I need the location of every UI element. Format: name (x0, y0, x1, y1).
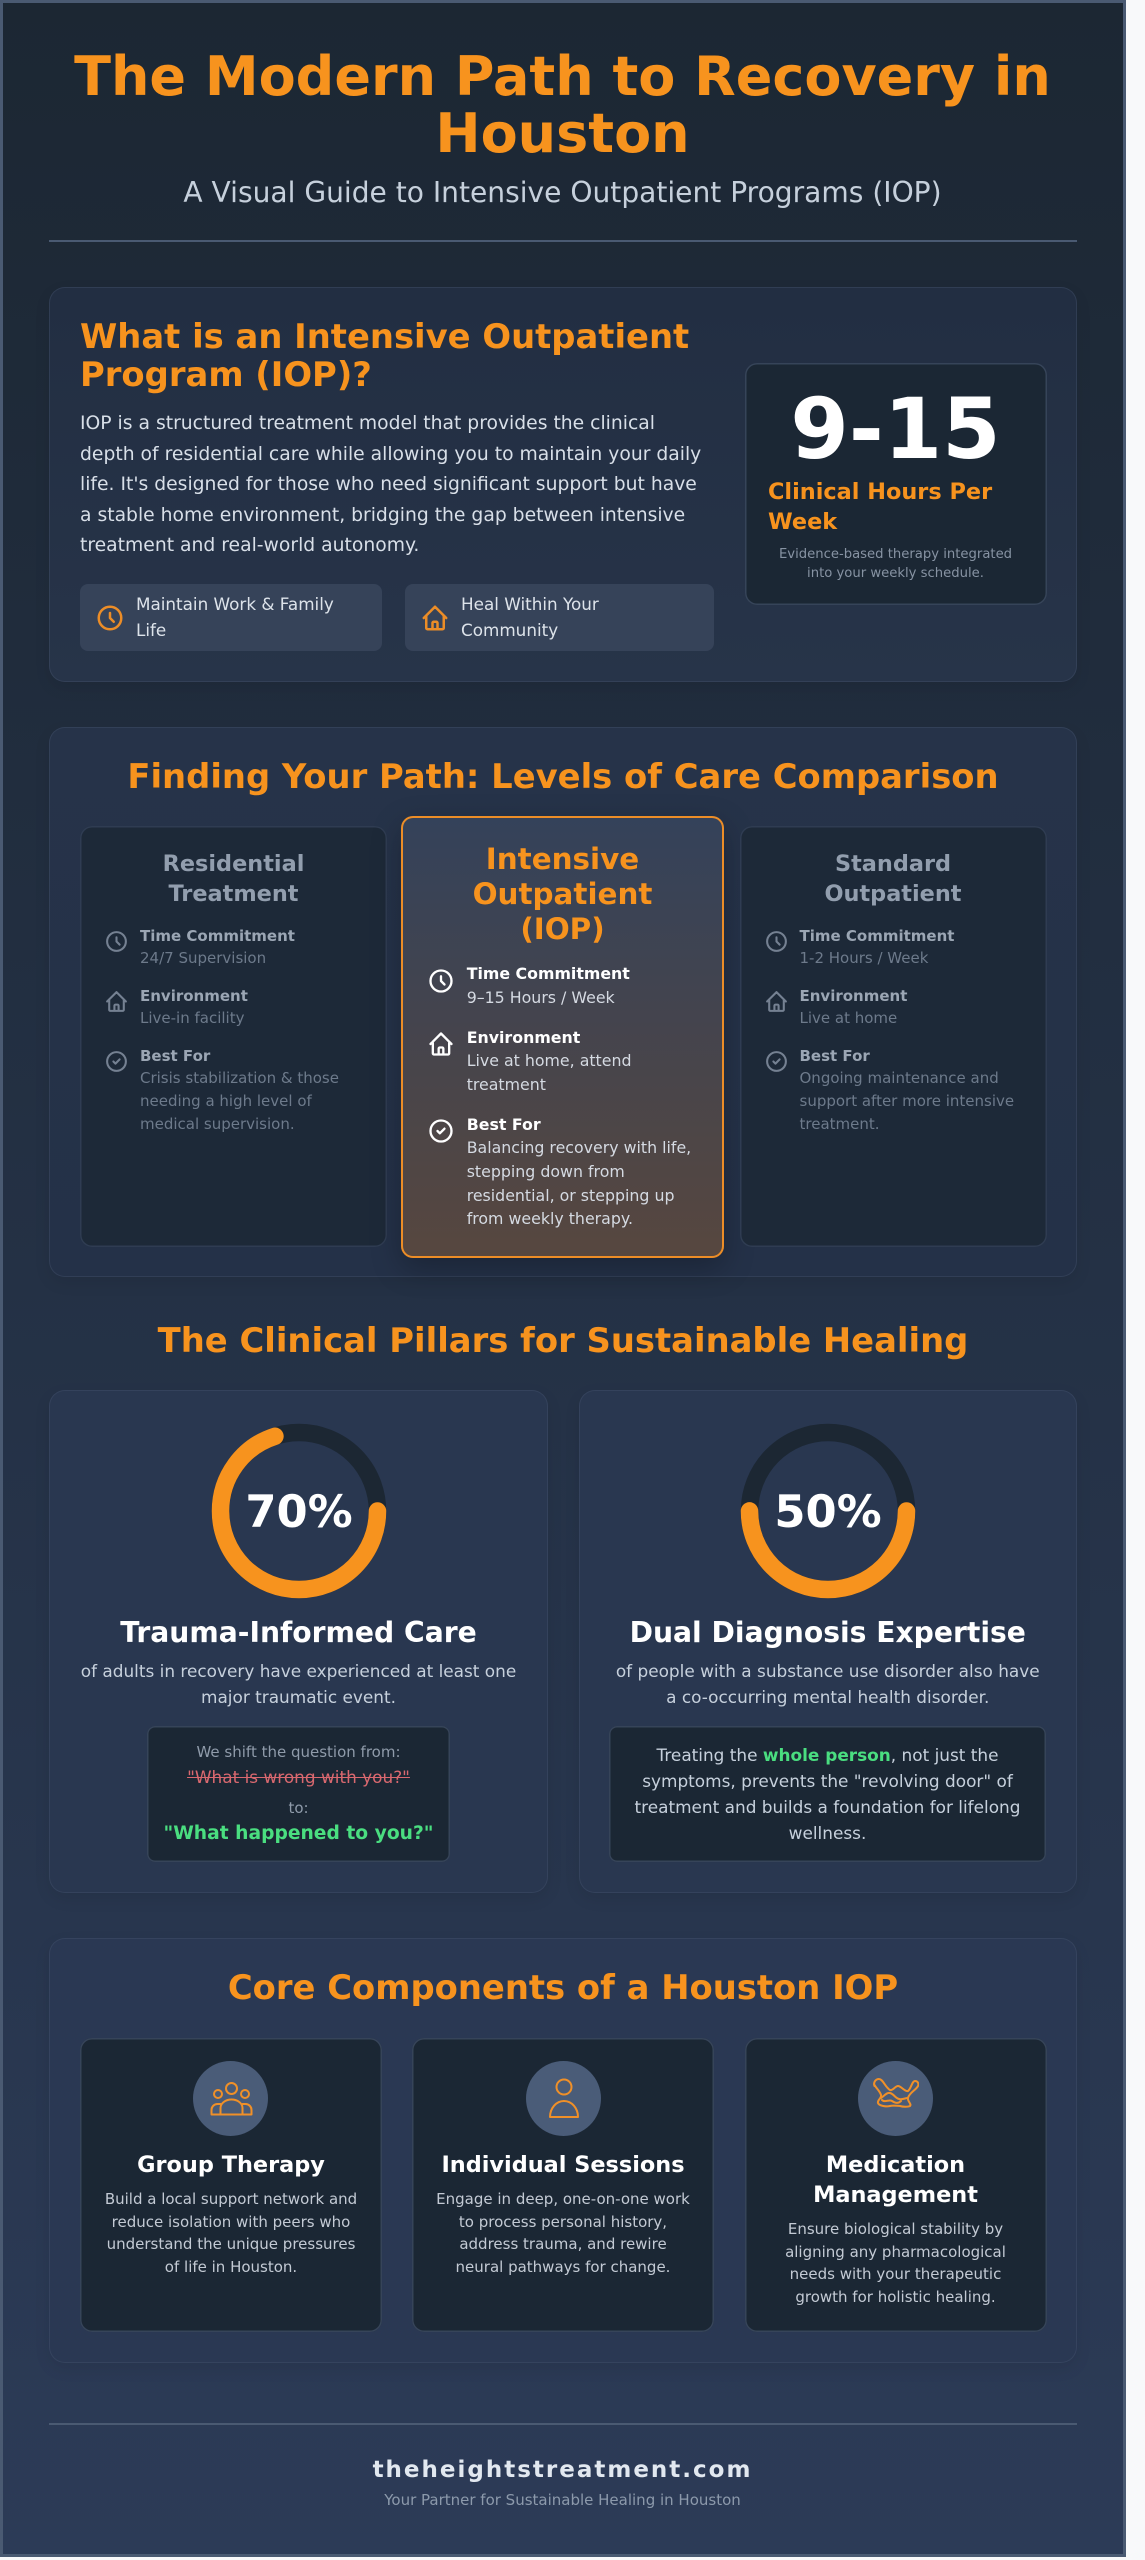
card: intensive outpatient highlighted (401, 816, 724, 1258)
callout text (634, 1744, 1020, 1843)
card: medication management (744, 2038, 1046, 2332)
environment: Live at home, attend (467, 1051, 632, 1070)
benefit label: Heal Within Your (461, 594, 599, 614)
benefit label: Maintain Work & Family (136, 594, 334, 614)
card title: Management (813, 2182, 978, 2208)
text block: IOP description: depth of residential care while allowing you to maintain your daily (80, 444, 701, 465)
environment: Environment (800, 987, 907, 1005)
card title (824, 851, 962, 907)
callout connector: to: (288, 1799, 309, 1817)
icon: check (766, 1051, 787, 1072)
callout text: symptoms, prevents the "revolving door" of (642, 1771, 1013, 1791)
card description: Ensure biological stability by (788, 2220, 1003, 2238)
best for: needing a high level of (140, 1092, 312, 1110)
icon: clock (429, 969, 453, 993)
card: residential treatment (80, 826, 387, 1246)
best for: Best For (800, 1047, 870, 1065)
best for: residential, or stepping up (467, 1186, 674, 1205)
time commitment: 1-2 Hours / Week (800, 949, 928, 967)
footer website: theheightstreatment.com (373, 2457, 752, 2483)
panel: core components (49, 1938, 1077, 2362)
pillar description (81, 1661, 516, 1707)
environment: treatment (467, 1075, 546, 1094)
time commitment: Time Commitment (800, 927, 954, 945)
time commitment (140, 927, 295, 967)
best for: medical supervision. (140, 1115, 295, 1133)
card title (163, 851, 304, 907)
best for: from weekly therapy. (467, 1209, 633, 1228)
card title: Treatment (168, 881, 298, 907)
icon: home (766, 991, 787, 1012)
benefit: community (405, 584, 714, 651)
icon: check (106, 1051, 127, 1072)
card description (785, 2220, 1006, 2306)
callout: whole person (609, 1726, 1046, 1862)
card description: Build a local support network and (105, 2190, 357, 2208)
text block: IOP description: treatment and real-world autonomy. (80, 535, 419, 556)
icon: group (193, 2060, 268, 2136)
best for (140, 1047, 339, 1133)
card description: growth for holistic healing. (795, 2288, 996, 2306)
card description: neural pathways for change. (456, 2258, 670, 2276)
card title: Outpatient (473, 877, 652, 911)
best for (467, 1115, 691, 1228)
card description: of life in Houston. (165, 2258, 297, 2276)
best for: Ongoing maintenance and (800, 1069, 999, 1087)
stat note (779, 547, 1012, 581)
card title (813, 2152, 978, 2208)
environment (467, 1028, 632, 1094)
time commitment (800, 927, 954, 967)
card title: Group Therapy (137, 2152, 325, 2178)
environment: Live at home (800, 1009, 897, 1027)
text block: IOP description: a stable home environment, bridging the gap between intensive (80, 505, 685, 526)
time commitment: Time Commitment (467, 964, 630, 983)
pillar description: of people with a substance use disorder also have (616, 1661, 1040, 1681)
card description (436, 2190, 690, 2276)
best for: Balancing recovery with life, (467, 1138, 691, 1157)
card title: Outpatient (824, 881, 962, 907)
best for: Best For (140, 1047, 210, 1065)
pillar description: major traumatic event. (201, 1687, 396, 1707)
environment: Environment (140, 987, 248, 1005)
card description: aligning any pharmacological (785, 2242, 1006, 2260)
card description (105, 2190, 357, 2276)
stat label: Week (768, 509, 837, 535)
card title: Intensive (486, 842, 639, 876)
stat card: 9-15 hours (744, 363, 1046, 605)
icon: clock (98, 606, 122, 630)
environment: Environment (467, 1028, 580, 1046)
time commitment (466, 964, 630, 1007)
best for: stepping down from (467, 1162, 625, 1181)
card description: understand the unique pressures (107, 2235, 355, 2253)
icon: clock (766, 931, 787, 952)
card title: Medication (826, 2152, 965, 2178)
time commitment: 24/7 Supervision (140, 949, 266, 967)
donut chart: 70% (212, 1424, 386, 1598)
benefit label: Community (461, 620, 558, 640)
benefit: work and family (80, 584, 382, 651)
heading: comparison: Finding Your Path: Levels of Care Comparison (127, 757, 999, 796)
footer tagline: Your Partner for Sustainable Healing in Houston (384, 2491, 741, 2509)
subtitle: A Visual Guide to Intensive Outpatient Programs (IOP) (183, 176, 942, 209)
callout intro: We shift the question from: (196, 1743, 401, 1761)
panel: dual diagnosis (578, 1390, 1077, 1893)
pillar description (616, 1661, 1040, 1707)
environment (800, 987, 908, 1027)
pillar description: of adults in recovery have experienced at least one (81, 1661, 516, 1681)
stat label (768, 479, 992, 535)
icon: check (429, 1119, 453, 1143)
heading: what is an IOP (80, 316, 689, 394)
card description: reduce isolation with peers who (112, 2212, 350, 2230)
heading: clinical pillars: The Clinical Pillars for Sustainable Healing (158, 1321, 968, 1360)
icon: home (429, 1032, 453, 1056)
callout: question shift (147, 1726, 450, 1862)
icon: person (526, 2060, 600, 2136)
icon: home (422, 605, 448, 630)
benefit label (461, 594, 599, 640)
struck question: "What is wrong with you?" (187, 1767, 410, 1787)
donut chart: 70%: 70% (245, 1484, 352, 1538)
heading: what is an IOP: What is an Intensive Outpatient (80, 316, 689, 356)
pillar title: Trauma-Informed Care (120, 1616, 477, 1649)
best for: Crisis stabilization & those (140, 1069, 339, 1087)
title (74, 44, 1051, 164)
card: standard outpatient (740, 826, 1046, 1246)
callout text: Treating the whole person, not just the (657, 1744, 998, 1764)
donut chart: 50% (740, 1424, 916, 1598)
pillar description: a co-occurring mental health disorder. (666, 1687, 989, 1707)
card title: Individual Sessions (441, 2152, 685, 2178)
best for: support after more intensive (800, 1092, 1014, 1110)
text block: IOP description: IOP is a structured treatment model that provides the clinical (80, 413, 655, 434)
stat note: Evidence-based therapy integrated (779, 547, 1012, 562)
card title (473, 842, 652, 946)
card title: Standard (835, 851, 951, 877)
callout text: treatment and builds a foundation for lifelong (635, 1797, 1020, 1817)
title: Houston (435, 102, 690, 164)
benefit label: Life (136, 620, 166, 640)
card: group therapy (80, 2038, 382, 2332)
card description: needs with your therapeutic (790, 2265, 1001, 2283)
card description: Engage in deep, one-on-one work (436, 2190, 690, 2208)
environment (140, 987, 248, 1027)
benefit label (136, 594, 334, 640)
pillar title: Dual Diagnosis Expertise (630, 1616, 1026, 1649)
heading: core components: Core Components of a Houston IOP (228, 1968, 898, 2006)
stat note: into your weekly schedule. (807, 566, 984, 581)
donut chart: 50%: 50% (774, 1484, 882, 1538)
environment: Live-in facility (140, 1009, 244, 1027)
time commitment: Time Commitment (140, 927, 295, 945)
panel: what is an IOP (49, 287, 1077, 682)
card: individual sessions (412, 2038, 714, 2332)
card title: (IOP) (520, 912, 605, 946)
icon: handshake (858, 2060, 933, 2136)
heading: what is an IOP: Program (IOP)? (80, 355, 372, 394)
stat label: Clinical Hours Per (768, 479, 992, 505)
stat number: 9-15 (790, 380, 1001, 478)
best for: treatment. (800, 1115, 880, 1133)
text block: IOP description: life. It's designed for those who need significant support but have (80, 474, 697, 495)
title: The Modern Path to Recovery in (74, 44, 1051, 108)
time commitment: 9–15 Hours / Week (467, 988, 615, 1007)
card description: address trauma, and rewire (459, 2235, 667, 2253)
card description: to process personal history, (459, 2212, 667, 2230)
icon: home (106, 991, 127, 1012)
callout text: wellness. (789, 1823, 866, 1843)
new question: "What happened to you?" (163, 1823, 434, 1844)
panel: levels of care comparison (49, 727, 1077, 1277)
panel: trauma-informed care (49, 1390, 548, 1893)
text block: IOP description (80, 413, 701, 556)
icon: clock (106, 931, 127, 952)
card title: Residential (163, 851, 304, 877)
best for: Best For (467, 1115, 541, 1134)
best for (800, 1047, 1014, 1133)
